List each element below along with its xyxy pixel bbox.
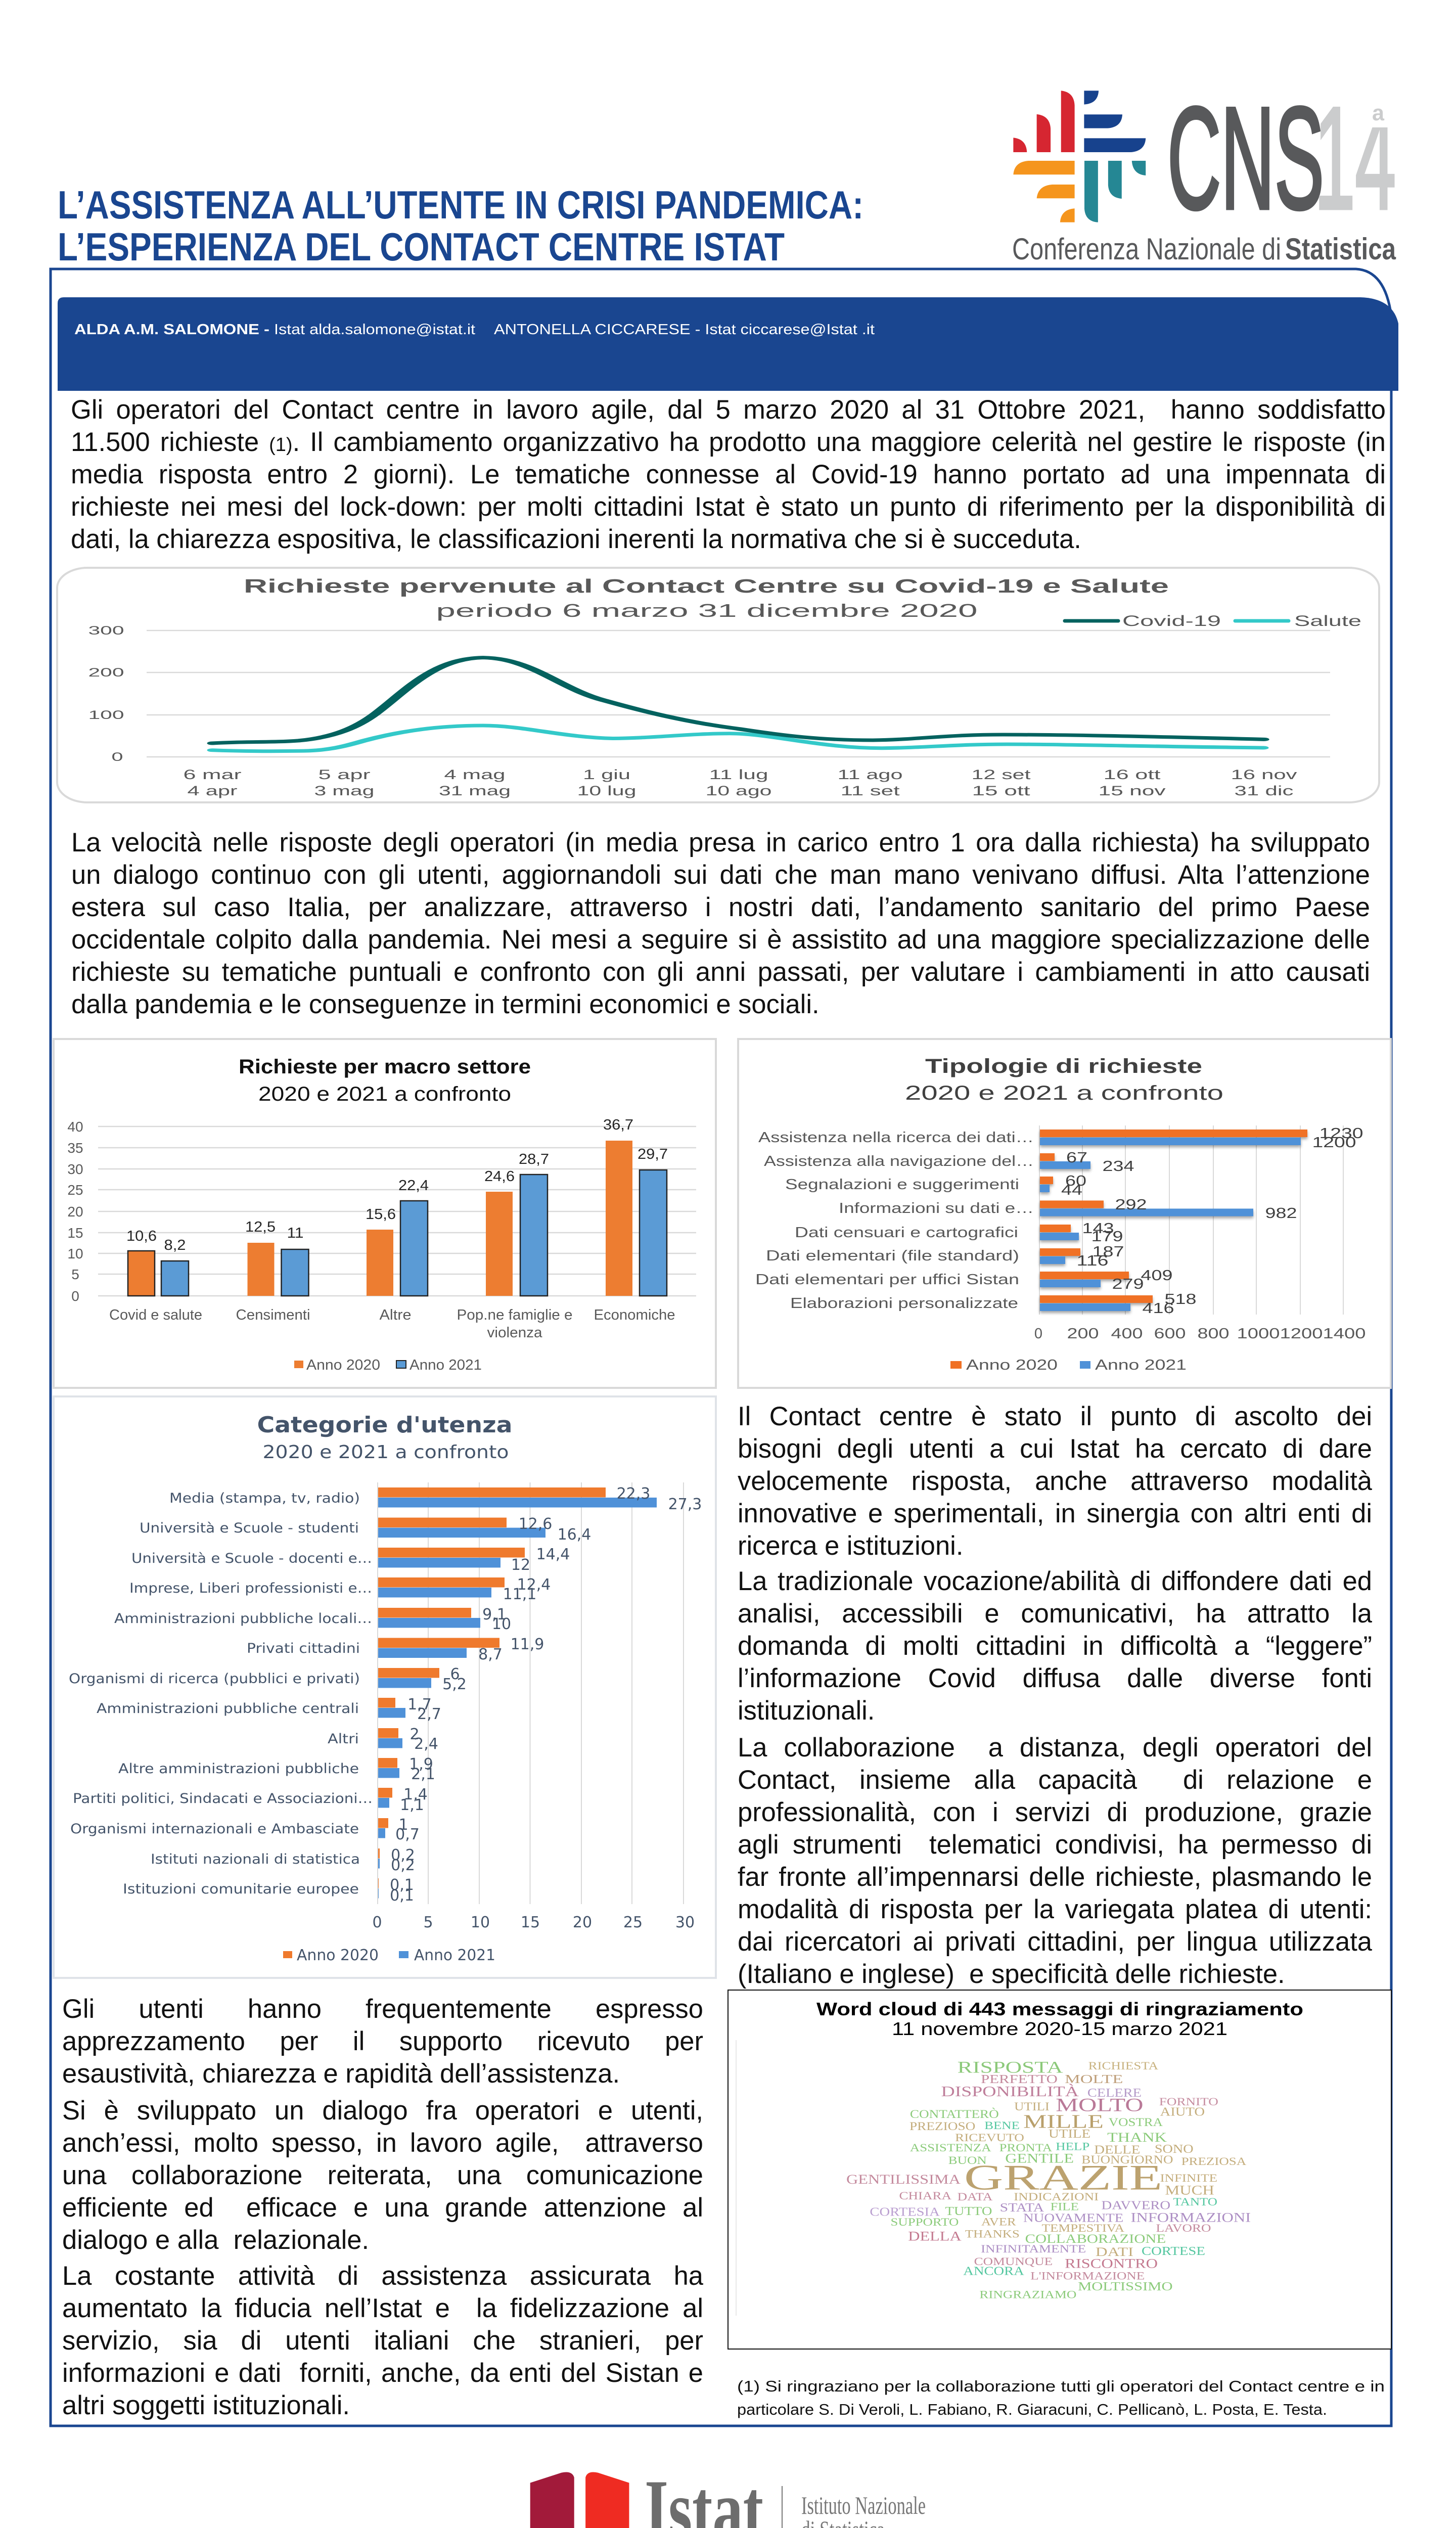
chart: Tipologie di richieste: 1000 bbox=[1237, 1326, 1280, 1342]
text block: punto di ascolto: ricerca e istituzioni. bbox=[738, 1531, 963, 1561]
panel: word cloud: RINGRAZIAMO bbox=[979, 2289, 1076, 2301]
panel: word cloud: MOLTISSIMO bbox=[1078, 2280, 1173, 2293]
text block: dialogo bbox=[62, 2096, 703, 2255]
chart: Categorie d'utenza: 0,2 bbox=[391, 1857, 415, 1874]
logo: Istat bbox=[530, 2462, 926, 2528]
chart: Categorie d'utenza: 2020 e 2021 a confronto bbox=[263, 1442, 509, 1463]
panel: word cloud: DAVVERO bbox=[1102, 2198, 1170, 2212]
text block: collaborazione a distanza: La collaborazione a distanza, degli operatori del bbox=[738, 1733, 1372, 1763]
chart: line chart Covid-19 e Salute: 31 dic bbox=[1235, 783, 1293, 798]
chart: Richieste per macro settore: 2020 e 2021 a confronto bbox=[258, 1083, 511, 1105]
chart: line chart Covid-19 e Salute: 16 nov bbox=[1231, 767, 1297, 782]
text block: velocità nelle risposte: La velocità nelle risposte degli operatori (in media presa in carico entro 1 ora dalla richiesta) ha sviluppato bbox=[71, 828, 1370, 857]
chart: Categorie d'utenza: 12,4 bbox=[517, 1576, 551, 1594]
panel: word cloud: RICHIESTA bbox=[1088, 2060, 1158, 2072]
chart: Tipologie di richieste: 0 bbox=[1034, 1326, 1042, 1342]
panel: word cloud: COMUNQUE bbox=[974, 2256, 1053, 2268]
chart: Categorie d'utenza: 2,4 bbox=[414, 1735, 438, 1753]
panel: word cloud: DELLE bbox=[1094, 2143, 1140, 2156]
text block: collaborazione a distanza: Contact, insieme alla capacità di relazione e bbox=[738, 1765, 1372, 1795]
text block: velocità nelle risposte: richieste su tematiche puntuali e confronto con gli anni passati, per valutare i cambiamenti in atto causati bbox=[71, 957, 1370, 987]
footnote: (1) Si ringraziano per la collaborazione tutti gli operatori del Contact centre e in bbox=[737, 2377, 1385, 2395]
panel: word cloud: MOLTO bbox=[1056, 2095, 1144, 2115]
chart: Richieste per macro settore: 36,7 bbox=[603, 1117, 633, 1133]
chart: line chart Covid-19 e Salute: 12 set bbox=[972, 767, 1031, 782]
chart: Categorie d'utenza: 14,4 bbox=[536, 1546, 570, 1563]
panel: word cloud: PREZIOSA bbox=[1181, 2156, 1247, 2168]
chart: line chart Covid-19 e Salute: 300 bbox=[88, 624, 124, 638]
panel: word cloud: INDICAZIONI bbox=[1014, 2191, 1099, 2203]
chart: Richieste per macro settore: 10,6 bbox=[126, 1228, 157, 1244]
panel: word cloud: CONTATTERÒ bbox=[910, 2108, 999, 2120]
panel: word cloud: NUOVAMENTE bbox=[1023, 2211, 1123, 2225]
panel: word cloud: FILE bbox=[1051, 2201, 1079, 2213]
panel: word cloud bbox=[728, 1990, 1391, 2349]
chart: Richieste per macro settore: 8,2 bbox=[164, 1237, 186, 1253]
chart: Categorie d'utenza: Altre amministrazioni pubbliche bbox=[118, 1761, 359, 1777]
chart: Tipologie di richieste: Assistenza nella ricerca dei dati… bbox=[758, 1130, 1034, 1146]
panel: main frame bbox=[51, 269, 1391, 2426]
chart: Categorie d'utenza: 0,2 bbox=[391, 1846, 415, 1864]
chart: Categorie d'utenza: Media (stampa, tv, radio) bbox=[169, 1491, 360, 1506]
chart: Richieste per macro settore bbox=[54, 1039, 716, 1388]
chart: Richieste per macro settore: 0 bbox=[71, 1288, 79, 1304]
text block: dialogo: efficiente ed efficace e una grande attenzione al bbox=[62, 2193, 703, 2223]
chart: line chart Covid-19 e Salute: Salute bbox=[1294, 613, 1361, 629]
chart: line chart Covid-19 e Salute: 200 bbox=[88, 666, 124, 680]
panel: word cloud: PERFETTO bbox=[981, 2072, 1058, 2086]
chart: Tipologie di richieste: Dati elementari (file standard) bbox=[766, 1248, 1019, 1264]
text block: dialogo: dialogo e alla relazionale. bbox=[62, 2225, 369, 2255]
chart: Categorie d'utenza: 20 bbox=[573, 1914, 592, 1931]
chart: Tipologie di richieste: 400 bbox=[1111, 1326, 1143, 1342]
chart: Categorie d'utenza: Altri bbox=[328, 1731, 359, 1747]
chart: Categorie d'utenza: 8,7 bbox=[478, 1646, 503, 1663]
chart: line chart Covid-19 e Salute: 3 mag bbox=[314, 783, 374, 798]
chart: Richieste per macro settore: 29,7 bbox=[638, 1146, 668, 1162]
panel: authors band: ALDA A.M. SALOMONE - bbox=[74, 322, 269, 338]
panel: word cloud: UTILE bbox=[1049, 2127, 1090, 2141]
text block: velocità nelle risposte: occidentale colpito dalla pandemia. Nei mesi a seguire si è assistito ad una maggiore specializzazione delle bbox=[71, 925, 1370, 955]
chart: Tipologie di richieste: Anno 2020 bbox=[966, 1357, 1058, 1373]
chart: Tipologie di richieste: 1200 bbox=[1280, 1326, 1323, 1342]
panel: word cloud: VOSTRA bbox=[1109, 2116, 1163, 2129]
chart: line chart Covid-19 e Salute: 11 ago bbox=[837, 767, 903, 782]
title: L’ASSISTENZA ALL’UTENTE IN CRISI PANDEMICA: bbox=[58, 183, 863, 227]
chart: Richieste per macro settore: 30 bbox=[67, 1161, 83, 1177]
panel: word cloud: TUTTO bbox=[945, 2204, 992, 2218]
text block: velocità nelle risposte: un dialogo continuo con gli utenti, aggiornandoli sui dati che man mano venivano diffusi. Alta l’attenzione bbox=[71, 860, 1370, 890]
footnote: particolare S. Di Veroli, L. Fabiano, R. Giaracuni, C. Pellicanò, L. Posta, E. Testa. bbox=[737, 2401, 1327, 2418]
panel: word cloud: TANTO bbox=[1173, 2196, 1217, 2208]
chart: Tipologie di richieste: 279 bbox=[1112, 1276, 1144, 1292]
chart: Categorie d'utenza: 25 bbox=[623, 1914, 643, 1931]
chart: Tipologie di richieste: 292 bbox=[1115, 1197, 1147, 1213]
chart: Richieste per macro settore: 24,6 bbox=[484, 1168, 515, 1185]
panel: word cloud: INFINITAMENTE bbox=[981, 2243, 1086, 2255]
chart: Categorie d'utenza: 1 bbox=[398, 1816, 408, 1834]
chart: line chart Covid-19 e Salute: 1 giu bbox=[583, 767, 630, 782]
chart: Richieste per macro settore: violenza bbox=[487, 1325, 542, 1341]
chart: line chart Covid-19 e Salute: periodo 6 marzo 31 dicembre 2020 bbox=[436, 600, 978, 621]
chart: Richieste per macro settore: 10 bbox=[67, 1246, 83, 1261]
chart: Tipologie di richieste: Assistenza alla navigazione del… bbox=[764, 1153, 1034, 1169]
chart: Richieste per macro settore: Altre bbox=[379, 1307, 412, 1323]
text block: collaborazione a distanza: (Italiano e inglese) e specificità delle richieste. bbox=[738, 1959, 1285, 1989]
text block: velocità nelle risposte: estera sul caso Italia, per analizzare, attraverso i nostri dati, l’andamento sanitario del primo Paese bbox=[71, 892, 1370, 922]
chart: Tipologie di richieste: 200 bbox=[1067, 1326, 1099, 1342]
text block: apprezzamento bbox=[62, 1994, 703, 2089]
chart: Categorie d'utenza: Categorie d'utenza bbox=[257, 1412, 513, 1438]
chart: Categorie d'utenza: 15 bbox=[521, 1914, 540, 1931]
panel: word cloud: RICEVUTO bbox=[955, 2132, 1024, 2144]
chart: Tipologie di richieste bbox=[738, 1039, 1391, 1388]
chart: Categorie d'utenza: 0 bbox=[372, 1914, 382, 1931]
panel: word cloud: Word cloud di 443 messaggi di ringraziamento bbox=[816, 1999, 1303, 2019]
chart: Categorie d'utenza: Istituzioni comunitarie europee bbox=[123, 1881, 359, 1897]
chart: Richieste per macro settore: 22,4 bbox=[398, 1178, 429, 1194]
chart: Tipologie di richieste: 234 bbox=[1102, 1158, 1134, 1175]
chart: line chart Covid-19 e Salute: 15 ott bbox=[972, 783, 1030, 798]
chart: Categorie d'utenza: 1,1 bbox=[400, 1796, 424, 1814]
logo: CNS 14a conference: Conferenza Nazionale di bbox=[1012, 232, 1281, 266]
panel: word cloud: SUPPORTO bbox=[890, 2217, 959, 2228]
chart: Categorie d'utenza: 10 bbox=[492, 1615, 511, 1633]
chart: Categorie d'utenza: 2 bbox=[410, 1726, 420, 1743]
chart: Richieste per macro settore: 12,5 bbox=[245, 1219, 276, 1235]
chart: Categorie d'utenza: 22,3 bbox=[617, 1485, 650, 1503]
panel: word cloud: CORTESIA bbox=[870, 2205, 940, 2219]
chart: Categorie d'utenza: 1,9 bbox=[409, 1755, 433, 1773]
chart: Categorie d'utenza: Anno 2021 bbox=[414, 1947, 495, 1964]
chart: Tipologie di richieste: 409 bbox=[1141, 1268, 1173, 1284]
chart: Categorie d'utenza: 2,1 bbox=[411, 1766, 435, 1783]
title: L’ESPERIENZA DEL CONTACT CENTRE ISTAT bbox=[58, 224, 785, 269]
text block: vocazione: domanda di molti cittadini in difficoltà a “leggere” bbox=[738, 1631, 1372, 1661]
chart: line chart Covid-19 e Salute: Covid-19 bbox=[1122, 613, 1221, 629]
panel: word cloud: CELERE bbox=[1087, 2086, 1142, 2100]
chart: Richieste per macro settore: 25 bbox=[67, 1182, 83, 1198]
panel: word cloud: TEMPESTIVA bbox=[1042, 2223, 1124, 2234]
text block: collaborazione a distanza: professionalità, con i servizi di produzione, grazie bbox=[738, 1797, 1372, 1827]
panel: word cloud: L'INFORMAZIONE bbox=[1030, 2270, 1145, 2282]
logo: CNS 14a conference: a bbox=[1372, 101, 1385, 125]
panel: word cloud: THANKS bbox=[965, 2228, 1020, 2240]
panel: word cloud: STATA bbox=[1000, 2201, 1044, 2214]
text block: apprezzamento: Gli utenti hanno frequentemente espresso bbox=[62, 1994, 703, 2024]
text block: vocazione: l’informazione Covid diffusa dalle diverse fonti bbox=[738, 1663, 1372, 1693]
panel: word cloud: SONO bbox=[1155, 2142, 1194, 2155]
chart: Categorie d'utenza: 1,4 bbox=[403, 1786, 428, 1803]
text block: dialogo: una collaborazione reiterata, una comunicazione bbox=[62, 2160, 703, 2190]
chart: Tipologie di richieste: 143 bbox=[1082, 1221, 1114, 1237]
chart: line chart Covid-19 e Salute: 10 ago bbox=[706, 783, 771, 798]
panel: word cloud: DISPONIBILITÀ bbox=[941, 2084, 1079, 2100]
panel: word cloud: MUCH bbox=[1165, 2183, 1214, 2198]
text block: velocità nelle risposte: dalla pandemia e le conseguenze in termini economici e sociali. bbox=[71, 989, 820, 1019]
chart: Tipologie di richieste: 60 bbox=[1065, 1173, 1086, 1189]
chart: Tipologie di richieste: 67 bbox=[1066, 1150, 1087, 1166]
chart: Richieste per macro settore: 15,6 bbox=[366, 1206, 396, 1223]
logo: Istat: Istituto Nazionale bbox=[801, 2491, 926, 2519]
chart: line chart Covid-19 e Salute: 15 nov bbox=[1098, 783, 1166, 798]
panel: word cloud: AVER bbox=[981, 2216, 1016, 2228]
chart: Categorie d'utenza: Privati cittadini bbox=[247, 1641, 360, 1656]
chart: Tipologie di richieste: 1200 bbox=[1312, 1135, 1356, 1151]
panel: word cloud: BENE bbox=[984, 2120, 1020, 2132]
text block: dialogo: Si è sviluppato un dialogo fra operatori e utenti, bbox=[62, 2096, 703, 2126]
chart: Categorie d'utenza: Università e Scuole - studenti bbox=[140, 1520, 359, 1536]
text block: fiducia: altri soggetti istituzionali. bbox=[62, 2390, 350, 2420]
text block: introduzione: richieste nei mesi del lock-down: per molti cittadini Istat è stato un punto di riferimento per la disponibilità di bbox=[71, 492, 1386, 522]
chart: Categorie d'utenza: 11,1 bbox=[503, 1586, 536, 1603]
panel: word cloud: ASSISTENZA bbox=[910, 2142, 991, 2154]
chart: Richieste per macro settore: Economiche bbox=[594, 1307, 675, 1323]
panel: word cloud: 11 novembre 2020-15 marzo 2021 bbox=[892, 2018, 1227, 2039]
chart: line chart Covid-19 e Salute: 11 set bbox=[840, 783, 900, 798]
chart: Richieste per macro settore: Pop.ne famiglie e bbox=[457, 1307, 572, 1323]
panel: word cloud: PRONTA bbox=[999, 2142, 1053, 2154]
panel: word cloud: THANK bbox=[1107, 2130, 1167, 2145]
chart: Categorie d'utenza: Partiti politici, Sindacati e Associazioni… bbox=[73, 1791, 373, 1807]
text block: vocazione: istituzionali. bbox=[738, 1696, 875, 1726]
panel: word cloud: INFINITE bbox=[1160, 2172, 1217, 2184]
chart: Tipologie di richieste: Dati censuari e cartografici bbox=[795, 1225, 1018, 1241]
text block: collaborazione a distanza: far fronte all’impennarsi delle richieste, plasmando le bbox=[738, 1862, 1372, 1892]
panel: word cloud: INFORMAZIONI bbox=[1131, 2210, 1251, 2225]
panel: word cloud: CHIARA bbox=[899, 2190, 951, 2202]
panel: word cloud: RISCONTRO bbox=[1065, 2256, 1158, 2271]
chart: Tipologie di richieste: 2020 e 2021 a confronto bbox=[905, 1082, 1223, 1104]
chart: Richieste per macro settore: 5 bbox=[71, 1267, 79, 1282]
chart: Categorie d'utenza bbox=[54, 1396, 716, 1978]
panel: word cloud: CORTESE bbox=[1142, 2244, 1205, 2258]
chart: Categorie d'utenza: Anno 2020 bbox=[297, 1947, 379, 1964]
text block: introduzione: media risposta entro 2 giorni). Le tematiche connesse al Covid-19 hanno portato ad una impennata di bbox=[71, 460, 1386, 489]
text block: vocazione bbox=[738, 1566, 1372, 1726]
panel: word cloud: PREZIOSO bbox=[909, 2120, 975, 2133]
chart: Categorie d'utenza: 9,1 bbox=[482, 1606, 507, 1623]
panel: authors band: Istat alda.salomone@istat.it bbox=[274, 322, 475, 338]
chart: line chart Covid-19 e Salute: 11 lug bbox=[709, 767, 768, 782]
chart: Categorie d'utenza: Imprese, Liberi professionisti e… bbox=[129, 1581, 372, 1596]
chart: Tipologie di richieste: 44 bbox=[1061, 1182, 1082, 1198]
text block: punto di ascolto bbox=[738, 1402, 1372, 1561]
chart: line chart Covid-19 e Salute: 0 bbox=[111, 750, 123, 764]
chart: Richieste per macro settore: 35 bbox=[67, 1140, 83, 1156]
text block: punto di ascolto: velocemente risposta, anche attraverso modalità bbox=[738, 1466, 1372, 1496]
text block: introduzione bbox=[71, 395, 1386, 554]
panel: word cloud: ANCORA bbox=[963, 2264, 1024, 2278]
chart: Tipologie di richieste: 116 bbox=[1077, 1253, 1108, 1269]
chart: Richieste per macro settore: Richieste per macro settore bbox=[239, 1056, 531, 1078]
panel: word cloud: RISPOSTA bbox=[958, 2058, 1063, 2076]
chart: Tipologie di richieste: 416 bbox=[1143, 1300, 1174, 1317]
panel: word cloud: DATI bbox=[1096, 2245, 1133, 2259]
text block: introduzione: dati, la chiarezza espositiva, le classificazioni inerenti la normativa che si è succeduta. bbox=[71, 524, 1081, 554]
text block: vocazione: La tradizionale vocazione/abilità di diffondere dati ed bbox=[738, 1566, 1372, 1596]
chart: line chart Covid-19 e Salute: Richieste pervenute al Contact Centre su Covid-19 e Salute bbox=[244, 576, 1169, 597]
chart: Tipologie di richieste: 982 bbox=[1265, 1205, 1297, 1222]
logo: CNS 14a conference: Statistica bbox=[1285, 232, 1396, 266]
chart: Richieste per macro settore: 28,7 bbox=[519, 1151, 549, 1167]
panel: word cloud: LAVORO bbox=[1156, 2223, 1211, 2234]
panel: word cloud: BUON bbox=[948, 2154, 987, 2166]
chart: Categorie d'utenza: Organismi di ricerca (pubblici e privati) bbox=[69, 1671, 360, 1687]
chart: Richieste per macro settore: 40 bbox=[67, 1119, 83, 1135]
chart: Tipologie di richieste: 1230 bbox=[1320, 1125, 1363, 1142]
chart: Richieste per macro settore: Anno 2020 bbox=[306, 1357, 380, 1373]
text block: fiducia: aumentato la fiducia nell’Istat e la fidelizzazione al bbox=[62, 2293, 703, 2323]
text block: dialogo: anch’essi, molto spesso, in lavoro agile, attraverso bbox=[62, 2128, 703, 2158]
text block: collaborazione a distanza: modalità di risposta per la variegata platea di utenti: bbox=[738, 1894, 1372, 1924]
chart: line chart Covid-19 e Salute: 16 ott bbox=[1103, 767, 1161, 782]
chart: Categorie d'utenza: 1,7 bbox=[407, 1696, 432, 1713]
chart: Categorie d'utenza: 30 bbox=[675, 1914, 695, 1931]
chart: Tipologie di richieste: 187 bbox=[1092, 1244, 1124, 1260]
chart: line chart Covid-19 e Salute: 100 bbox=[88, 708, 124, 722]
chart: Categorie d'utenza: 12,6 bbox=[519, 1515, 552, 1533]
text block: velocità nelle risposte bbox=[71, 828, 1370, 1019]
chart: Categorie d'utenza: 5 bbox=[423, 1914, 433, 1931]
text block: collaborazione a distanza: agli strumenti telematici condivisi, ha permesso di bbox=[738, 1830, 1372, 1860]
chart: Tipologie di richieste: 600 bbox=[1154, 1326, 1186, 1342]
text block: collaborazione a distanza bbox=[738, 1733, 1372, 1989]
panel: word cloud: DELLA bbox=[908, 2229, 962, 2243]
panel: word cloud: GENTILISSIMA bbox=[846, 2172, 961, 2187]
chart: Richieste per macro settore: Covid e salute bbox=[109, 1307, 202, 1323]
title bbox=[58, 183, 863, 269]
chart: Categorie d'utenza: Amministrazioni pubbliche centrali bbox=[97, 1701, 359, 1717]
text block: fiducia bbox=[62, 2261, 703, 2420]
chart: line chart Covid-19 e Salute: 10 lug bbox=[577, 783, 636, 798]
chart: line chart Covid-19 e Salute: 4 apr bbox=[187, 783, 238, 798]
logo: CNS 14a conference bbox=[1012, 77, 1398, 266]
chart: Tipologie di richieste: 179 bbox=[1091, 1229, 1123, 1245]
chart: Categorie d'utenza: 12 bbox=[511, 1556, 530, 1574]
panel: word cloud: COLLABORAZIONE bbox=[1025, 2232, 1166, 2246]
chart: Tipologie di richieste: 518 bbox=[1165, 1291, 1196, 1307]
chart: Tipologie di richieste: 800 bbox=[1197, 1326, 1230, 1342]
text block: fiducia: La costante attività di assistenza assicurata ha bbox=[62, 2261, 703, 2291]
chart: Richieste per macro settore: 15 bbox=[67, 1225, 83, 1241]
panel: word cloud: GRAZIE bbox=[964, 2158, 1162, 2197]
chart: Categorie d'utenza: 10 bbox=[471, 1914, 490, 1931]
chart: Tipologie di richieste: Anno 2021 bbox=[1095, 1357, 1187, 1373]
panel: word cloud: UTILI bbox=[1014, 2100, 1050, 2113]
chart: Categorie d'utenza: 11,9 bbox=[511, 1636, 544, 1653]
chart: Categorie d'utenza: 27,3 bbox=[668, 1496, 702, 1513]
chart: Categorie d'utenza: 0,7 bbox=[395, 1826, 420, 1843]
panel: word cloud: FORNITO bbox=[1159, 2096, 1218, 2108]
chart: Tipologie di richieste: Elaborazioni personalizzate bbox=[790, 1295, 1018, 1312]
chart: Categorie d'utenza: Istituti nazionali di statistica bbox=[151, 1852, 360, 1867]
text block: apprezzamento: apprezzamento per il supporto ricevuto per bbox=[62, 2026, 703, 2056]
text block: punto di ascolto: innovative e sperimentali, in sinergia con altri enti di bbox=[738, 1499, 1372, 1528]
chart: Richieste per macro settore: Anno 2021 bbox=[410, 1357, 482, 1373]
panel: word cloud: MILLE bbox=[1023, 2111, 1104, 2132]
text block: fiducia: servizio, sia di utenti italiani che stranieri, per bbox=[62, 2326, 703, 2356]
chart: Categorie d'utenza: 0,1 bbox=[390, 1887, 414, 1905]
chart: Categorie d'utenza: 2,7 bbox=[417, 1705, 441, 1723]
chart: line chart Covid-19 e Salute bbox=[57, 568, 1379, 802]
chart: Tipologie di richieste: Tipologie di richieste bbox=[925, 1055, 1202, 1077]
chart: Tipologie di richieste: Informazioni su dati e… bbox=[839, 1200, 1034, 1216]
text block: punto di ascolto: bisogni degli utenti a cui Istat ha cercato di dare bbox=[738, 1434, 1372, 1464]
chart: Tipologie di richieste: Segnalazioni e suggerimenti bbox=[785, 1177, 1019, 1193]
text block: introduzione: 11.500 richieste (1). Il cambiamento organizzativo ha prodotto una maggiore celerità nel gestire le risposte (in bbox=[71, 427, 1386, 457]
chart: Categorie d'utenza: 16,4 bbox=[558, 1526, 591, 1544]
chart: Categorie d'utenza: 0,1 bbox=[390, 1876, 414, 1894]
panel: word cloud: MOLTE bbox=[1065, 2072, 1123, 2086]
chart: line chart Covid-19 e Salute: 31 mag bbox=[439, 783, 511, 798]
chart: Tipologie di richieste: Dati elementari per uffici Sistan bbox=[755, 1272, 1019, 1288]
chart: Tipologie di richieste: 1400 bbox=[1323, 1326, 1366, 1342]
text block: collaborazione a distanza: dai ricercatori ai privati cittadini, per lingua utilizzata bbox=[738, 1927, 1372, 1957]
panel: word cloud: GENTILE bbox=[1005, 2151, 1074, 2166]
panel: authors band: ANTONELLA CICCARESE - Istat ciccarese@Istat .it bbox=[494, 322, 875, 338]
text block: introduzione: Gli operatori del Contact centre in lavoro agile, dal 5 marzo 2020 al 31 Ottobre 2021, hanno soddisfatto bbox=[71, 395, 1386, 425]
chart: Categorie d'utenza: Organismi internazionali e Ambasciate bbox=[70, 1821, 359, 1837]
panel: word cloud: AIUTO bbox=[1160, 2105, 1205, 2118]
text block: apprezzamento: esaustività, chiarezza e rapidità dell’assistenza. bbox=[62, 2059, 620, 2089]
chart: line chart Covid-19 e Salute: 6 mar bbox=[183, 767, 242, 782]
chart: line chart Covid-19 e Salute: 4 mag bbox=[444, 767, 506, 782]
text block: punto di ascolto: Il Contact centre è stato il punto di ascolto dei bbox=[738, 1402, 1372, 1431]
text block: fiducia: informazioni e dati forniti, anche, da enti del Sistan e bbox=[62, 2358, 703, 2388]
panel: word cloud: BUONGIORNO bbox=[1081, 2153, 1173, 2166]
chart: Categorie d'utenza: Amministrazioni pubbliche locali… bbox=[114, 1611, 372, 1627]
chart: Richieste per macro settore: Censimenti bbox=[236, 1307, 310, 1323]
chart: Categorie d'utenza: 6 bbox=[450, 1665, 460, 1683]
chart: Richieste per macro settore: 20 bbox=[67, 1204, 83, 1220]
chart: Categorie d'utenza: Università e Scuole - docenti e… bbox=[131, 1551, 372, 1566]
chart: Richieste per macro settore: 11 bbox=[287, 1225, 303, 1241]
chart: line chart Covid-19 e Salute: 5 apr bbox=[318, 767, 371, 782]
footnote bbox=[737, 2377, 1385, 2418]
panel: word cloud: DATA bbox=[958, 2191, 993, 2203]
panel: authors band bbox=[58, 297, 1398, 391]
chart: Categorie d'utenza: 5,2 bbox=[442, 1676, 467, 1693]
text block: vocazione: analisi, accessibili e comunicativi, ha attratto la bbox=[738, 1599, 1372, 1629]
panel: word cloud: HELP bbox=[1056, 2141, 1089, 2153]
